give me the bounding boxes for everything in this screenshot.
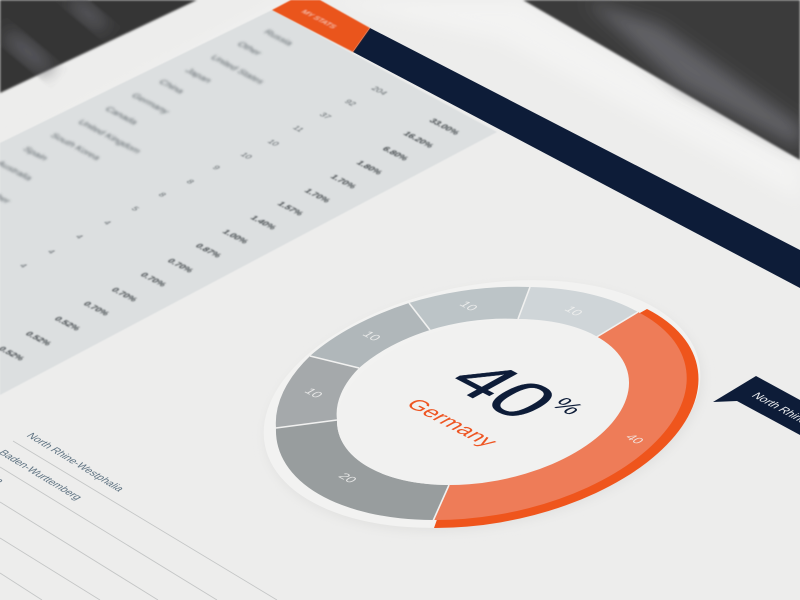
table column: percentages: 6.80% xyxy=(380,145,411,162)
table column: percentages: 33.00% xyxy=(427,117,462,136)
segment: 40 xyxy=(433,312,687,520)
table column: percentages: 0.70% xyxy=(109,286,140,303)
table column: countries: China xyxy=(156,78,188,95)
table column: percentages: 1.70% xyxy=(302,187,333,204)
table column: countries: United States xyxy=(208,54,267,85)
dark backdrop top left xyxy=(0,0,197,93)
table column: rank counts: 9 xyxy=(210,164,223,171)
list rules xyxy=(0,441,277,600)
table column: countries: United Kingdom xyxy=(76,119,144,155)
table column: rank counts: 4 xyxy=(45,248,58,255)
callout tag: North Rhine xyxy=(713,376,800,453)
paper lighter margin xyxy=(0,0,800,200)
disc shadow xyxy=(244,250,724,566)
table column: rank counts xyxy=(17,85,390,269)
table column: rank counts: 10 xyxy=(265,138,282,147)
state list xyxy=(0,431,277,600)
segment value labels: 10 xyxy=(456,299,482,313)
table column: percentages: 0.87% xyxy=(193,242,224,259)
table column: rank counts: 92 xyxy=(342,98,359,107)
table column: rank counts: 8 xyxy=(184,178,197,185)
table column: percentages: 0.52% xyxy=(52,315,83,332)
segment: 10 light slate xyxy=(409,287,530,330)
table column: countries: South Korea xyxy=(48,132,104,161)
centre value 40: 40 xyxy=(430,350,577,430)
table column: rank counts: 10 xyxy=(238,151,255,160)
table column: countries: Russia xyxy=(261,28,296,47)
navy header bar xyxy=(353,28,800,288)
segment: 20 xyxy=(276,420,449,520)
table column: countries xyxy=(0,28,296,204)
table column: countries: Canada xyxy=(103,106,141,126)
table column: percentages: 16.20% xyxy=(401,130,436,149)
table column: rank counts: 4 xyxy=(73,233,86,240)
segment: 10 palest xyxy=(518,287,638,338)
table column: percentages: 0.70% xyxy=(81,300,112,317)
table column: percentages: 1.57% xyxy=(275,200,306,217)
orange tab: my stats xyxy=(272,0,370,52)
segment value labels: 10 xyxy=(359,329,385,343)
dark backdrop top right xyxy=(523,0,800,160)
centre disc xyxy=(323,296,643,508)
segment value labels: 20 xyxy=(335,471,361,485)
table column: rank counts: 11 xyxy=(290,124,307,133)
disc base xyxy=(243,246,721,562)
segment value labels: 10 xyxy=(301,386,327,400)
country label: Germany xyxy=(401,395,504,450)
table column: rank counts: 5 xyxy=(129,205,142,212)
table column: percentages: 0.70% xyxy=(165,257,196,274)
segment value labels xyxy=(301,299,648,485)
table panel xyxy=(0,10,497,395)
segment: 10 grey xyxy=(276,356,359,428)
table column: percentages: 1.80% xyxy=(354,159,385,176)
table column: percentages: 1.00% xyxy=(220,228,251,245)
segment separators xyxy=(276,287,638,521)
table column: countries: Germany xyxy=(129,92,172,115)
table column: percentages xyxy=(0,117,462,362)
segment: 10 slate xyxy=(310,303,430,368)
segment value labels: 40 xyxy=(622,432,648,446)
table column: percentages: 0.70% xyxy=(138,271,169,288)
table column: rank counts: 37 xyxy=(317,111,334,120)
table column: rank counts: 4 xyxy=(17,262,30,269)
table column: countries: Other xyxy=(235,41,264,56)
table column: rank counts: 4 xyxy=(101,219,114,226)
donut chart xyxy=(243,246,724,566)
table column: rank counts: 204 xyxy=(369,85,390,96)
table column: percentages: 1.70% xyxy=(328,173,359,190)
table column: rank counts: 8 xyxy=(156,191,169,198)
percent sign: % xyxy=(545,394,589,418)
segment value labels: 10 xyxy=(561,304,587,318)
list labels: North Rhine-Westphalia xyxy=(23,431,127,493)
table column: percentages: 0.52% xyxy=(23,330,54,347)
orange tab: my stats: MY STATS xyxy=(299,9,339,30)
table column: countries: Japan xyxy=(183,67,214,84)
table column: countries: Spain xyxy=(21,146,51,162)
table column: percentages: 1.40% xyxy=(248,214,279,231)
orange outer band xyxy=(434,309,698,528)
